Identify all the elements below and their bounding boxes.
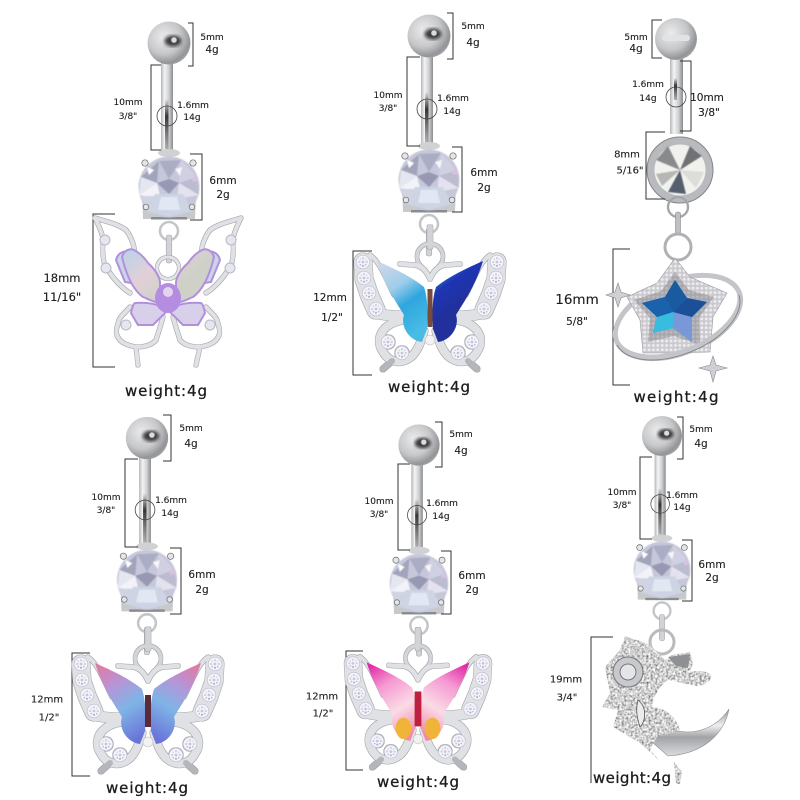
labels: pendant size: 1/2" bbox=[39, 712, 59, 724]
pendant: crescent moon with mermaid bbox=[602, 630, 729, 784]
labels: gem size: 6mm bbox=[470, 167, 498, 179]
labels: bar length: 10mm bbox=[114, 98, 142, 108]
labels: ball size bbox=[689, 425, 713, 450]
labels: pendant size: 12mm bbox=[31, 694, 63, 706]
labels: bar gauge: 1.6mm bbox=[437, 94, 469, 104]
labels: ball size: 5mm bbox=[179, 424, 203, 434]
labels: bar length: 3/8" bbox=[370, 510, 388, 520]
dimension brackets bbox=[613, 20, 691, 385]
icon: barbell and round gem bbox=[117, 417, 177, 655]
labels: ball size: 4g bbox=[184, 438, 198, 450]
labels: gem size: 6mm bbox=[209, 175, 237, 187]
labels: gem size bbox=[209, 175, 237, 201]
panel: butterfly ring, lilac bbox=[31, 415, 222, 797]
labels: bar gauge bbox=[666, 491, 698, 513]
labels: bar gauge: 14g bbox=[183, 113, 201, 123]
labels: bar length: 3/8" bbox=[698, 107, 720, 119]
labels: bar gauge: 14g bbox=[639, 94, 657, 104]
labels: bar length bbox=[374, 91, 402, 114]
labels: ball size: 5mm bbox=[624, 33, 648, 43]
labels: ball size bbox=[449, 430, 473, 457]
labels: bar length bbox=[114, 98, 142, 122]
dimension brackets bbox=[72, 415, 181, 776]
labels: pendant size: 19mm bbox=[550, 674, 582, 686]
labels: bar length bbox=[364, 497, 394, 520]
labels: bar length bbox=[608, 488, 636, 511]
labels: bar length: 10mm bbox=[374, 91, 402, 101]
pendant: pink enamel butterfly bbox=[346, 627, 490, 767]
pendant: star with orbit ring bbox=[603, 258, 753, 382]
labels: gem size: 5/16" bbox=[616, 166, 644, 176]
labels: gem size bbox=[188, 569, 216, 596]
labels: gem size: 8mm bbox=[614, 150, 640, 160]
labels: pendant size bbox=[550, 674, 582, 704]
labels: pendant size bbox=[555, 292, 599, 328]
labels: ball size: 4g bbox=[629, 43, 643, 55]
labels: ball size bbox=[200, 33, 224, 56]
labels: pendant size: 1/2" bbox=[321, 312, 343, 324]
pendant: blue enamel butterfly bbox=[356, 225, 504, 369]
labels: pendant size: 12mm bbox=[313, 292, 347, 304]
labels: bar gauge: 14g bbox=[443, 107, 461, 117]
labels: pendant size: 3/4" bbox=[557, 692, 577, 704]
labels: gem size: 2g bbox=[465, 584, 479, 596]
labels: bar gauge: 14g bbox=[161, 509, 179, 519]
icon: barbell and round gem bbox=[390, 424, 448, 656]
panel: butterfly ring, pink bbox=[306, 422, 490, 791]
pendant: lilac enamel butterfly bbox=[74, 627, 222, 771]
labels: bar length bbox=[690, 92, 724, 119]
weight label: weight:4g bbox=[377, 773, 459, 791]
panel: butterfly ring, purple bbox=[43, 22, 241, 400]
labels: ball size: 4g bbox=[694, 438, 708, 450]
labels: bar gauge bbox=[177, 101, 209, 123]
labels: pendant size: 1/2" bbox=[313, 708, 333, 720]
labels: ball size bbox=[624, 33, 648, 55]
labels: ball size bbox=[179, 424, 203, 450]
weight label: weight:4g bbox=[106, 779, 188, 797]
labels: gem size: 6mm bbox=[458, 570, 486, 582]
weight label: weight:4g bbox=[125, 382, 207, 400]
labels: bar gauge: 1.6mm bbox=[155, 496, 187, 506]
labels: bar length: 10mm bbox=[690, 92, 724, 104]
labels: bar gauge bbox=[437, 94, 469, 117]
labels: ball size: 5mm bbox=[449, 430, 473, 440]
labels: gem size bbox=[614, 150, 644, 176]
labels: gem size bbox=[458, 570, 486, 596]
panel: butterfly ring, blue bbox=[313, 13, 504, 396]
dimension brackets bbox=[93, 23, 202, 367]
labels: bar length: 3/8" bbox=[97, 506, 115, 516]
dimension brackets bbox=[591, 417, 692, 783]
icon: barbell and round gem bbox=[398, 14, 460, 256]
labels: pendant size bbox=[43, 271, 81, 304]
weight label: weight:4g bbox=[634, 388, 718, 406]
labels: pendant size: 18mm bbox=[43, 271, 81, 285]
labels: bar gauge: 1.6mm bbox=[666, 491, 698, 501]
labels: gem size bbox=[470, 167, 498, 194]
labels: ball size: 5mm bbox=[461, 22, 485, 32]
icon: barbell and round gem bbox=[634, 416, 690, 641]
labels: ball size: 5mm bbox=[200, 33, 224, 43]
labels: pendant size: 16mm bbox=[555, 292, 599, 308]
labels: gem size: 2g bbox=[216, 189, 230, 201]
labels: pendant size: 11/16" bbox=[43, 290, 81, 304]
labels: bar length: 10mm bbox=[92, 493, 120, 503]
labels: bar gauge: 1.6mm bbox=[426, 499, 458, 509]
labels: pendant size bbox=[306, 692, 338, 720]
panel: moon and mermaid ring bbox=[550, 416, 729, 787]
labels: ball size bbox=[461, 22, 485, 49]
labels: bar gauge bbox=[632, 80, 664, 104]
labels: bar gauge: 14g bbox=[673, 503, 691, 513]
labels: gem size bbox=[698, 559, 726, 584]
labels: pendant size bbox=[313, 292, 347, 324]
labels: bar gauge: 1.6mm bbox=[632, 80, 664, 90]
labels: ball size: 4g bbox=[454, 445, 468, 457]
labels: bar gauge bbox=[426, 499, 458, 522]
labels: gem size: 6mm bbox=[698, 559, 726, 571]
pendant: openwork purple butterfly bbox=[95, 218, 241, 365]
dimension brackets bbox=[353, 13, 462, 375]
labels: bar length: 3/8" bbox=[613, 501, 631, 511]
labels: ball size: 4g bbox=[205, 44, 219, 56]
labels: pendant size bbox=[31, 694, 63, 724]
labels: ball size: 5mm bbox=[689, 425, 713, 435]
labels: bar length: 3/8" bbox=[379, 104, 397, 114]
icon: barbell with bezel gem bbox=[647, 18, 713, 260]
labels: bar length: 3/8" bbox=[119, 112, 137, 122]
labels: pendant size: 12mm bbox=[306, 692, 338, 702]
panel: star and planet ring bbox=[555, 18, 753, 406]
labels: bar length: 10mm bbox=[364, 497, 394, 507]
labels: gem size: 2g bbox=[195, 584, 209, 596]
labels: bar gauge: 14g bbox=[432, 512, 450, 522]
labels: pendant size: 5/8" bbox=[566, 316, 588, 328]
labels: gem size: 6mm bbox=[188, 569, 216, 581]
labels: bar length: 10mm bbox=[608, 488, 636, 498]
labels: ball size: 4g bbox=[466, 37, 480, 49]
labels: bar gauge bbox=[155, 496, 187, 519]
weight label: weight:4g bbox=[593, 769, 671, 787]
icon: barbell and round gem bbox=[138, 22, 200, 263]
labels: gem size: 2g bbox=[477, 182, 491, 194]
labels: bar gauge: 1.6mm bbox=[177, 101, 209, 111]
labels: bar length bbox=[92, 493, 120, 516]
dimension brackets bbox=[346, 422, 451, 770]
labels: gem size: 2g bbox=[705, 572, 719, 584]
weight label: weight:4g bbox=[388, 378, 470, 396]
